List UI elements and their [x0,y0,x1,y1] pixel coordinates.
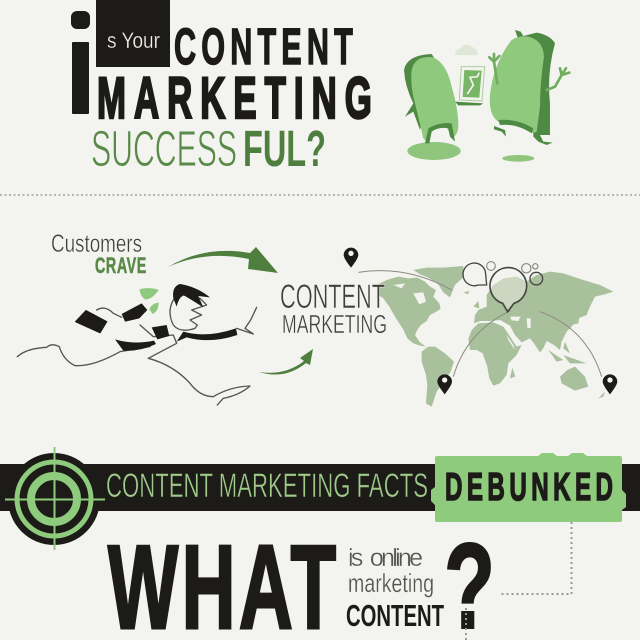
ground shadows [407,142,534,162]
text: marketing: marketing [348,568,434,598]
title: MARKETING: MARKETING [97,67,372,131]
text: CONTENT: CONTENT [280,278,385,316]
map gaps [393,283,531,350]
arrow: top curved green [168,247,278,273]
green DEBUNKED tag: DEBUNKED [445,465,613,508]
illustration: running businessman [17,284,257,405]
location pins [344,248,617,394]
title: CONTENT: CONTENT [174,18,353,75]
section divider [0,194,640,196]
world map [344,248,617,407]
text: CONTENT: CONTENT [346,598,444,633]
continents [377,266,613,407]
title: FUL?: FUL? [243,120,326,177]
cloud [455,45,477,55]
dotted connector [466,522,572,640]
right character [489,30,569,145]
left character [404,54,483,143]
speech bubbles [463,262,543,312]
banner bar [0,464,640,511]
text: Customers: Customers [51,230,142,258]
briefcase [76,311,107,333]
tablet [459,67,485,101]
jacket, arms and hair [115,284,237,351]
illustration: two green characters with tablet [404,30,569,162]
route lines [358,271,602,377]
text: is online: is online [348,544,423,572]
title: black box with "s Your": s Your [107,28,160,53]
head [170,295,207,330]
green DEBUNKED tag [431,453,626,522]
body outline [17,307,257,405]
sweat drops [139,288,159,314]
arrow: bottom curved green [259,349,313,375]
title: SUCCESS: SUCCESS [91,120,237,177]
title: large letter i [71,11,90,114]
text: MARKETING: MARKETING [282,309,387,339]
banner text: CONTENT MARKETING FACTS [106,467,428,505]
title: black box with "s Your" [96,0,170,67]
title [71,0,372,177]
text: CRAVE: CRAVE [95,253,146,278]
icon: target crosshair [5,447,105,550]
